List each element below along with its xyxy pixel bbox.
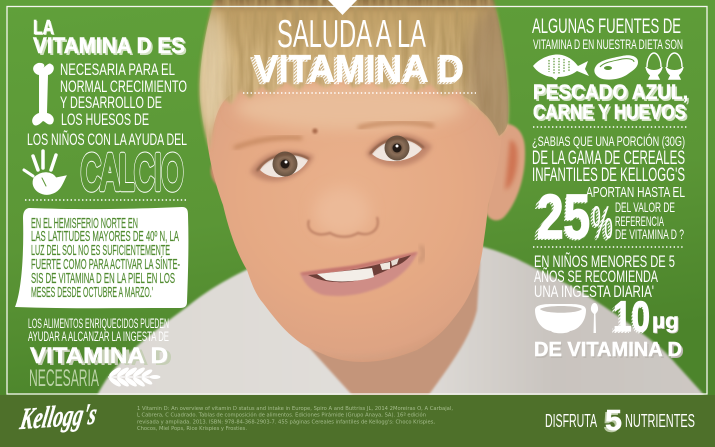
footnote: revisada y ampliada. 2013. ISBN: 978-84-368-2903-7. 455 páginas Cereales infantiles de Kellogg's: Choco Krispies, [137,418,435,425]
icon: bone [32,63,54,126]
stat: 10 µg: 10 [610,295,650,343]
mouth [300,246,424,296]
right eyebrow [358,122,434,128]
word: calcio: CALCIO [81,146,183,200]
stat: 25%: % [590,198,611,250]
text: fortified foods [28,316,169,344]
right dotted rule 2 [533,246,685,248]
footnote: L Cabrera, C Cuadrado. Tablas de composición de alimentos. Ediciones Pirámide (Grupo Anaya, SA). 16ª edición [137,412,426,419]
hair [198,0,523,150]
footnote: 1 Vitamin D: An overview of vitamin D status and intake in Europe, Spiro A and Buttriss JL, 2014 2Moreiras O, A Carbajal, [137,406,453,412]
stat: 10 µg: µg [653,311,680,334]
panel: daily intake [534,252,684,363]
text: bones and growth: Y DESARROLLO DE [60,93,162,112]
stat: 25%: 25 [533,185,590,254]
callout: speech bubble: FUERTE COMO PARA ACTIVAR LA SÍNTE- [31,256,180,273]
callout: speech bubble [15,207,188,308]
heading: vitamina D: VITAMINA D [32,345,172,370]
stat: 25%: 25 [537,183,590,252]
slogan: disfruta 5 nutrientes [545,405,695,439]
text: food sources [532,15,683,52]
title line 2: VITAMINA D [254,48,464,91]
text: of reference value: DEL VALOR DE [615,199,675,215]
logo: Kellogg's: Kellogg's [17,397,100,436]
heading: de vitamina D: DE VITAMINA D [535,341,684,363]
left eyebrow [234,137,302,148]
heading: fish, meat and eggs [533,81,690,126]
icon: eggs [646,53,683,79]
callout: speech bubble: EN EL HEMISFERIO NORTE EN [31,216,138,232]
text: did you know [532,133,685,201]
right eye [366,134,432,166]
panel: cereal portion [532,133,685,254]
heading: la vitamina D es: LA [33,17,54,39]
left ear [211,160,218,186]
right ear [486,124,525,220]
neck [304,262,480,396]
footnote: Chocos, Miel Pops, Rice Krispies y Frosties. [137,426,247,432]
face [206,62,502,362]
footnote [137,406,453,432]
heading: vitamina D: VITAMINA D [30,343,168,368]
heading: fish, meat and eggs: PESCADO AZUL, [535,83,690,106]
heading: la vitamina D es [33,17,187,60]
word: necesaria: NECESARIA [29,365,99,392]
text: fortified foods: AYUDAR A ALCANZAR LA INGESTA DE [28,329,169,344]
text: bones and growth [27,60,187,149]
text: of reference value [615,199,684,242]
slogan: disfruta 5 nutrientes: 5 [603,407,620,439]
text: bones and growth: NECESARIA PARA EL [60,60,175,79]
title shadow: VITAMINA D [250,50,462,93]
icon: meat [594,55,638,80]
top notch [328,0,357,15]
text: fortified foods: LOS ALIMENTOS ENRIQUECIDOS PUEDEN [28,316,169,331]
mole [312,128,318,134]
title line 1: SALUDA A LA [277,13,426,56]
right dotted rule 1 [533,126,688,128]
word: calcio: CALCIO [81,146,183,200]
shirt [97,246,705,396]
text: under five [534,252,675,301]
panel: fortified foods [28,316,172,392]
icon: hand print [24,151,66,194]
icon: bowl [535,304,586,333]
text: bones and growth: LOS HUESOS DE [61,110,149,129]
heading: la vitamina D es: VITAMINA D ES [35,35,187,60]
stat: 10 µg: µg [652,310,679,333]
forehead highlight [235,86,465,130]
footer band [0,395,715,447]
text: under five: UNA INGESTA DIARIA' [534,282,654,301]
left eye [250,151,314,181]
heading: fish, meat and eggs: PESCADO AZUL, [533,81,688,104]
icon: wheat [108,366,160,388]
text: bones and growth: LOS NIÑOS CON LA AYUDA DEL [27,130,187,149]
word: calcio [81,146,183,200]
icon: fish [533,55,589,80]
stat: 10 µg [610,293,680,343]
stat: 10 µg: 10 [613,293,650,341]
panel: what vitamin D does [24,17,187,200]
text: bones and growth: NORMAL CRECIMIENTO [60,77,187,96]
left dotted rule [25,199,187,201]
title dotted rule [243,92,476,94]
chin shadow [308,340,432,358]
callout: speech bubble: MESES DESDE OCTUBRE A MARZO.' [31,285,153,301]
title [250,13,464,93]
heading: de vitamina D: DE VITAMINA D [534,339,682,361]
panel: food sources [532,15,690,126]
slogan: disfruta 5 nutrientes: DISFRUTA [545,411,597,431]
icon: spoon [591,303,598,333]
heading: la vitamina D es: LA [34,18,55,40]
stat: 25%: % [592,196,613,248]
slogan: disfruta 5 nutrientes: 5 [605,405,622,437]
callout: speech bubble: SIS DE VITAMINA D EN LA PIEL EN LOS [31,271,175,287]
text: of reference value: REFERENCIA [615,213,664,229]
callout: speech bubble: LAS LATITUDES MAYORES DE 40º N, LA [31,229,179,245]
photo: smiling boy [97,0,705,396]
callout: speech bubble: LUZ DEL SOL NO ES SUFICIENTEMENTE [31,243,170,259]
nose [308,188,378,237]
heading: la vitamina D es: VITAMINA D ES [33,33,185,58]
